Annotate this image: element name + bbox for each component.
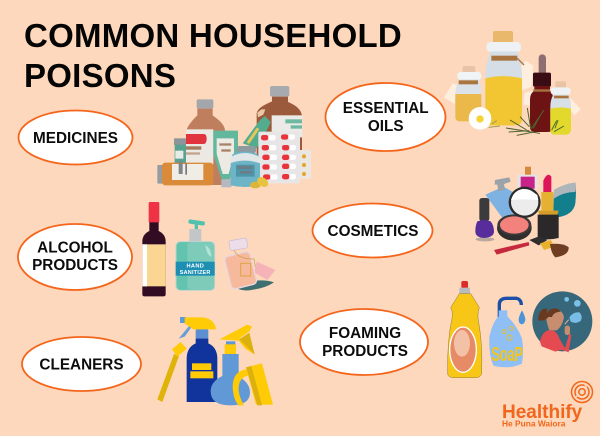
label: alcohol products: ALCOHOL bbox=[37, 240, 113, 257]
label: foaming products: FOAMING bbox=[329, 325, 401, 342]
icon: wine, hand sanitizer and perfume: HAND bbox=[186, 264, 204, 270]
logo: Healthify He Puna Waiora bbox=[502, 382, 592, 428]
icon: essential oil bottles bbox=[444, 31, 581, 135]
label: essential oils bbox=[326, 83, 446, 151]
label: medicines bbox=[18, 110, 132, 164]
logo: Healthify He Puna Waiora: He Puna Waiora bbox=[502, 418, 566, 428]
label: essential oils: ESSENTIAL bbox=[343, 100, 429, 117]
label: cleaners: CLEANERS bbox=[39, 356, 124, 374]
label: cosmetics: COSMETICS bbox=[328, 223, 418, 240]
label: medicines: MEDICINES bbox=[33, 130, 118, 147]
logo: Healthify He Puna Waiora: Healthify bbox=[502, 402, 583, 423]
label: alcohol products: PRODUCTS bbox=[32, 257, 118, 274]
label: alcohol products bbox=[18, 224, 132, 290]
icon: detergent, soap and child blowing bubbles: SoaP bbox=[491, 343, 523, 366]
icon: detergent, soap and child blowing bubbles bbox=[448, 281, 592, 378]
icon: wine, hand sanitizer and perfume: SANITIZER bbox=[180, 270, 211, 276]
label: foaming products bbox=[300, 309, 428, 375]
icon: cosmetics set bbox=[475, 167, 576, 257]
title bbox=[24, 17, 402, 94]
label: cleaners bbox=[22, 337, 141, 391]
title: COMMON HOUSEHOLD bbox=[24, 17, 402, 54]
icon: spray bottles and brush bbox=[157, 317, 273, 405]
icon: medicine bottles and blister packs bbox=[157, 86, 311, 189]
title: POISONS bbox=[24, 57, 176, 94]
label: essential oils: OILS bbox=[368, 118, 404, 135]
label: cosmetics bbox=[312, 204, 432, 258]
label: foaming products: PRODUCTS bbox=[322, 343, 408, 360]
icon: wine, hand sanitizer and perfume bbox=[142, 202, 275, 296]
